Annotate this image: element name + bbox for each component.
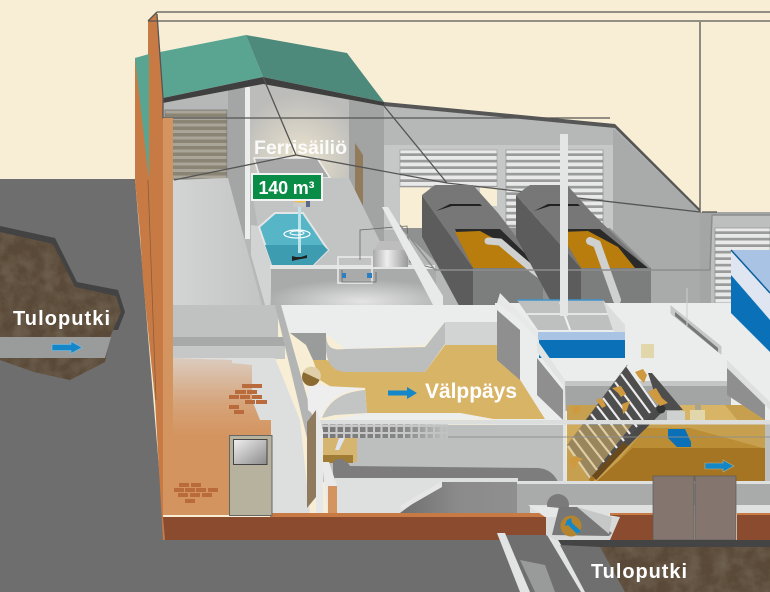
right side blue tank [731,250,770,352]
panel: hopper 1 [422,185,570,313]
bar screen [567,365,683,482]
front beam left section with grating [318,424,563,482]
floor gate [670,288,722,356]
sign: 140 m3 [252,174,322,200]
channel walls [290,322,497,421]
cream openings [400,187,430,229]
base wall [163,513,770,540]
orange plaster patch [163,358,271,515]
sign: 140 m3: 140 m³ [258,178,314,198]
ground [0,179,770,592]
beam across front [318,420,770,438]
orange column [163,118,173,515]
mixer [291,196,311,202]
inner door and partition [307,408,337,516]
panel: left excavation with inlet pipe [0,226,125,380]
side walls screen room [537,340,770,482]
walkway floors [173,178,262,305]
label: Ferrisäiliö: Ferrisäiliö [254,137,347,159]
label: Tuloputki bottom: Tuloputki [591,561,687,583]
panel: tank [251,196,436,305]
grey floor behind hoppers [400,228,651,305]
arrow: left inlet flow [52,342,82,354]
panel: hopper 2 [516,185,651,313]
louvre vents [400,150,497,187]
label: Tuloputki left: Tuloputki [13,308,110,330]
lower channel [333,459,770,516]
panel: roof [160,35,701,213]
bricks upper [229,384,267,414]
white column [560,134,568,316]
left louvre [165,110,227,179]
arrow: channel flow right [705,460,734,472]
inlet pipe [0,337,111,358]
front wall [271,268,436,305]
pipe frame line [400,215,770,270]
panel: Ferrisäiliö room [173,84,408,305]
small blue unit [668,429,691,447]
line over label [263,77,296,155]
panel: building back walls [163,84,770,307]
bricks lower [174,483,218,503]
panel: screen room [563,365,765,482]
panel: rear machine tank [497,293,654,380]
door [230,436,272,516]
inlet pit [528,505,620,540]
yellow screen channel [313,345,545,419]
pump equipment [336,226,433,283]
label: Välppäys: Välppäys [425,380,517,403]
screenings [568,369,668,469]
brown water [597,448,765,481]
front doors grey [653,476,736,540]
outer wall orange [135,12,165,540]
panel: main floors [163,118,770,515]
frame lines [148,12,770,212]
arrow: Välppäys flow [388,387,417,399]
white diagonal wall [382,207,443,305]
panel: bottom soil and inlet [497,533,770,592]
